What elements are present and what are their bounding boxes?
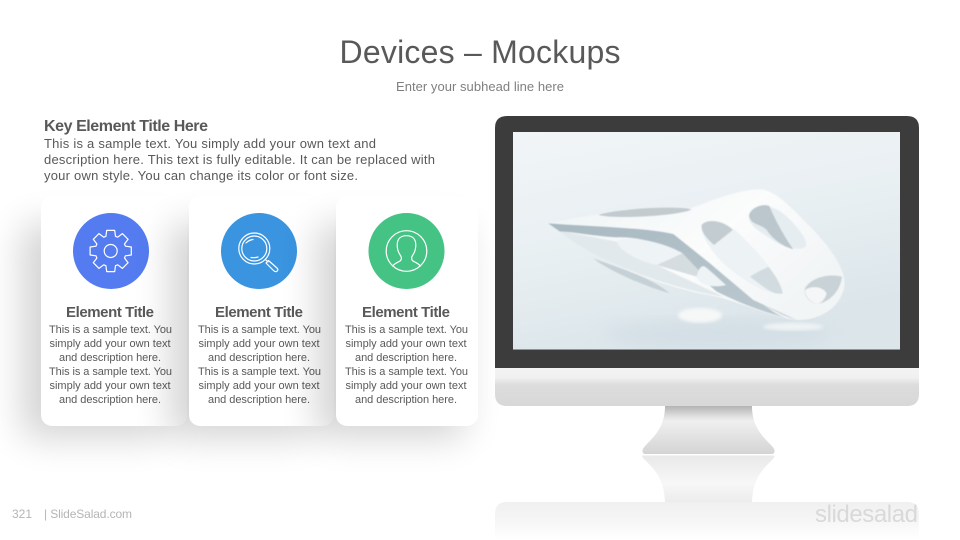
- card 2 text: simply add your own text: [198, 380, 320, 392]
- monitor stand: [642, 406, 775, 454]
- card 2 text: [198, 324, 321, 406]
- icon: gear: [73, 213, 149, 289]
- title: Devices – Mockups: [340, 34, 620, 70]
- panel: card 2: [170, 196, 334, 438]
- card 3 text: and description here.: [355, 394, 457, 406]
- key element paragraph: your own style. You can change its color or font size.: [44, 168, 358, 183]
- key element paragraph: This is a sample text. You simply add your own text and: [44, 136, 376, 151]
- card 2 text: and description here.: [208, 352, 310, 364]
- card 1 text: simply add your own text: [50, 380, 170, 392]
- card 1 text: simply add your own text: [50, 338, 170, 350]
- card 3 text: and description here.: [355, 352, 457, 364]
- card 3 text: This is a sample text. You: [345, 324, 468, 336]
- watermark: slidesalad: [815, 501, 918, 528]
- monitor mockup: [495, 116, 919, 540]
- card 3 title: Element Title: [362, 304, 450, 321]
- card 1 text: This is a sample text. You: [49, 324, 172, 336]
- card 2 text: This is a sample text. You: [198, 366, 321, 378]
- card 2 text: This is a sample text. You: [198, 324, 321, 336]
- key element paragraph: [44, 136, 435, 183]
- card 2 text: and description here.: [208, 394, 310, 406]
- card 3 text: simply add your own text: [346, 380, 466, 392]
- card 2 text: simply add your own text: [198, 338, 320, 350]
- key element heading: Key Element Title Here: [44, 118, 208, 135]
- key element text block: [44, 118, 435, 183]
- icon: magnifier: [221, 213, 297, 289]
- object: [548, 189, 845, 320]
- subhead: Enter your subhead line here: [396, 79, 564, 94]
- card 3 text: simply add your own text: [346, 338, 466, 350]
- panel: card 1: [22, 196, 187, 438]
- icon: person: [368, 213, 444, 289]
- card 1 text: and description here.: [59, 394, 161, 406]
- footer page number: 321: [12, 507, 32, 521]
- monitor chin: [495, 368, 919, 406]
- card 1 title: Element Title: [66, 304, 154, 321]
- key element paragraph: description here. This text is fully editable. It can be replaced with: [44, 152, 435, 167]
- card 3 text: This is a sample text. You: [345, 366, 468, 378]
- monitor bezel: [495, 116, 919, 368]
- floor shadow and glow: [648, 329, 693, 334]
- panel: card 3: [317, 196, 478, 438]
- card 3 text: [345, 324, 468, 406]
- card 2 title: Element Title: [215, 304, 303, 321]
- monitor reflection: [495, 456, 919, 540]
- footer site name: | SlideSalad.com: [44, 507, 132, 521]
- card 1 text: and description here.: [59, 352, 161, 364]
- card 1 text: This is a sample text. You: [49, 366, 172, 378]
- card 1 text: [49, 324, 172, 406]
- monitor screen image: [513, 132, 900, 350]
